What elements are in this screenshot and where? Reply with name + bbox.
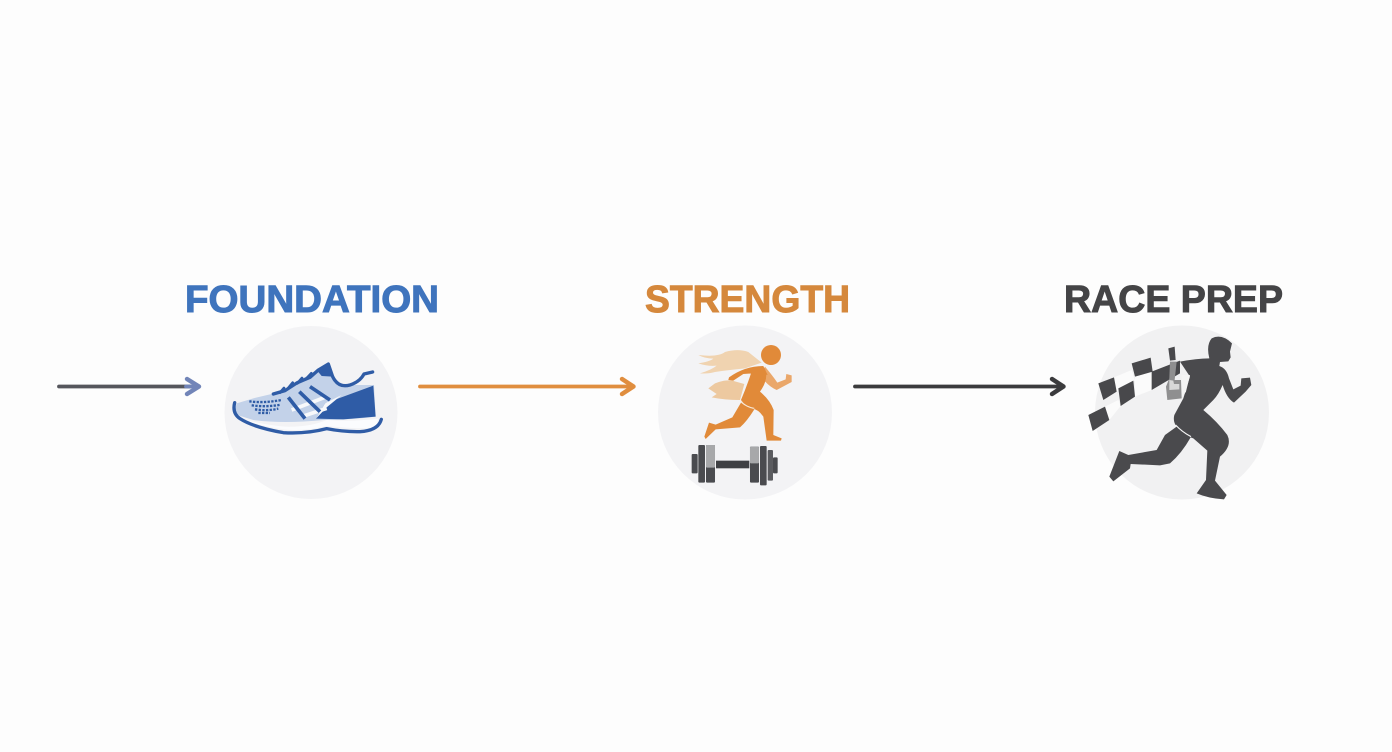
circle: foundation background [224, 326, 398, 499]
arrow: foundation to strength [420, 379, 634, 394]
arrow: strength to race prep [855, 379, 1064, 394]
icon: silhouette runner [1109, 337, 1251, 499]
panel: foundation icon [224, 326, 398, 499]
icon: water bottle [1166, 347, 1190, 400]
heading: strength: STRENGTH [645, 279, 850, 321]
icon: checkered flag [1088, 358, 1180, 431]
icon: orange runner [698, 345, 792, 441]
circle: strength background [658, 326, 832, 500]
heading: foundation: FOUNDATION [185, 279, 439, 321]
circle: race prep background [1095, 326, 1269, 500]
icon: dumbbell [692, 445, 778, 485]
arrow: lead-in to foundation [59, 379, 199, 394]
heading: race prep: RACE PREP [1064, 279, 1283, 321]
panel: strength icon [658, 326, 832, 500]
icon: running shoe [234, 363, 381, 433]
panel: race prep icon [1088, 326, 1269, 500]
